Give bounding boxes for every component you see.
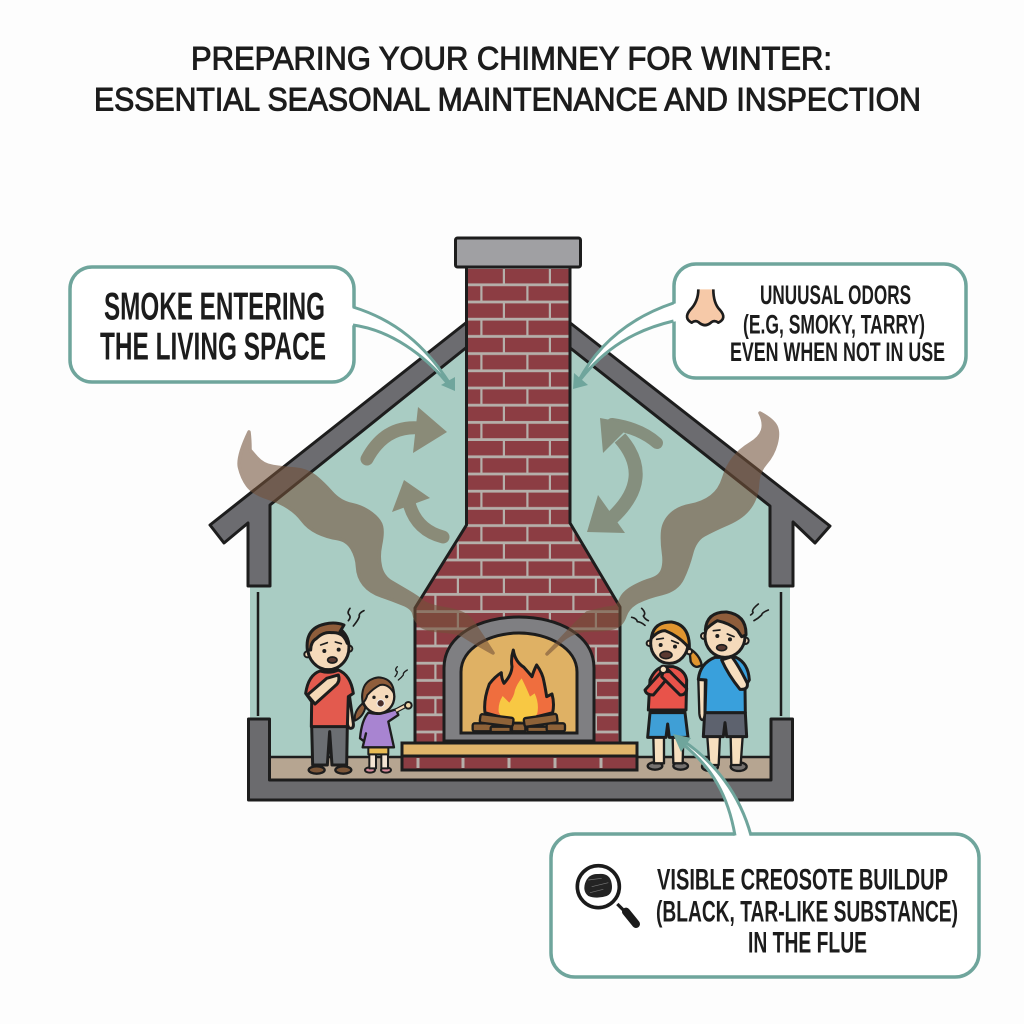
young girl [355,667,412,773]
callout text: creosote [656,864,958,960]
callout text: smoke [100,286,326,368]
roof left [210,322,467,586]
callout: smoke entering the living space [70,267,455,391]
smoke plume left [239,432,493,653]
older girl [632,608,702,770]
father [304,608,364,774]
smoke plume right [547,413,778,654]
chimney [415,238,620,745]
callout: creosote buildup [551,734,979,977]
icon: nose [687,289,723,325]
wall lines [258,592,781,716]
pointer: smoke callout [350,307,455,391]
fireplace [402,617,637,770]
older boy [698,604,768,771]
title: PREPARING YOUR CHIMNEY FOR WINTER: [191,40,832,76]
callout text: smoke: THE LIVING SPACE [100,326,326,368]
pointer: creosote callout [673,734,751,838]
airflow arrow upper left [367,407,447,459]
hearth [402,743,637,756]
floor [248,719,792,800]
father shoes [309,766,325,774]
airflow arrow lower left [392,480,443,537]
chimney cap [456,238,580,267]
airflow double arrow right [587,418,657,533]
title: ESSENTIAL SEASONAL MAINTENANCE AND INSPECTION [94,82,921,118]
fire [473,650,565,732]
pointer: odors callout [573,303,677,389]
callout: unusual odors [573,264,966,389]
chimney brick stack [415,266,620,745]
callout text: odors [730,280,945,367]
callout text: odors: UNUUSAL ODORS [760,280,911,310]
house interior [250,345,790,770]
fireplace arch [444,617,594,741]
callout text: odors: (E.G, SMOKY, TARRY) [743,310,925,340]
title [94,40,921,118]
icon: magnifier with creosote [577,866,636,924]
callout text: creosote: IN THE FLUE [748,926,867,960]
callout text: smoke: SMOKE ENTERING [104,286,325,328]
roof right [569,322,830,586]
